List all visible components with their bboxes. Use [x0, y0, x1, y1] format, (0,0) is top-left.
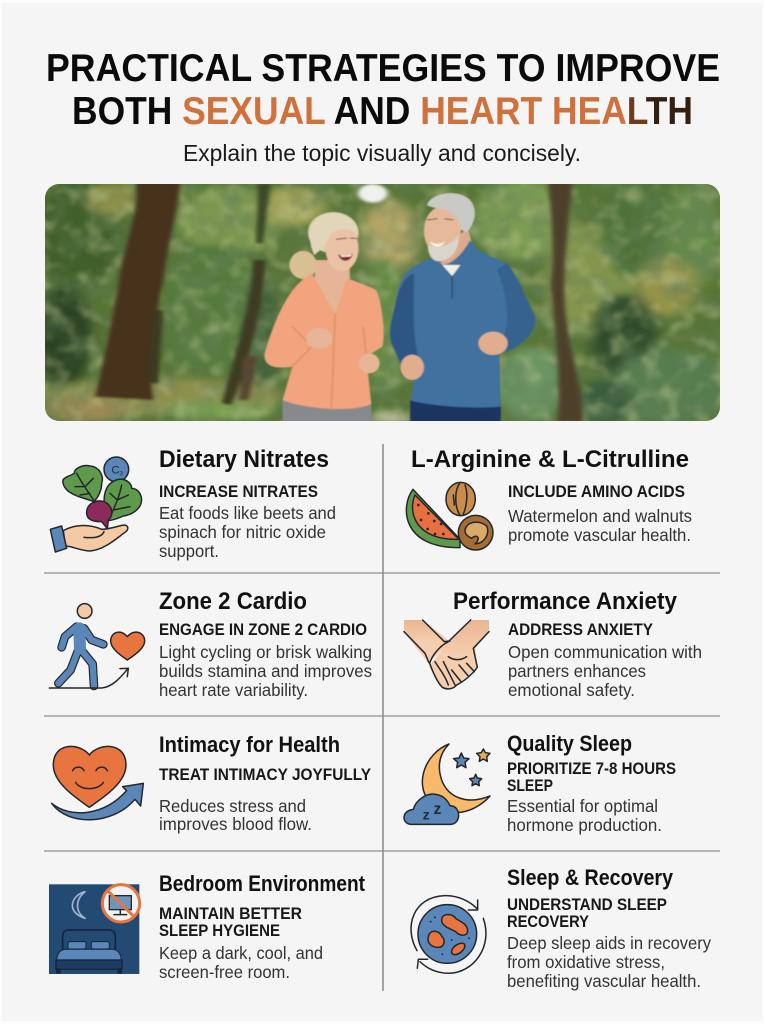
icon: crescent moon, stars and cloud: z — [423, 806, 430, 822]
icon: watermelon and walnuts — [406, 482, 493, 550]
subheading: SLEEP HYGIENE — [159, 922, 280, 940]
subheading: SLEEP — [507, 777, 553, 795]
body text: Deep sleep aids in recovery — [507, 933, 711, 953]
icon: cell with circular recovery arrows — [411, 896, 486, 973]
body text: emotional safety. — [508, 680, 635, 700]
body text: hormone production. — [507, 815, 662, 835]
title: PRACTICAL STRATEGIES TO IMPROVE — [46, 47, 720, 90]
icon: clasped hands — [404, 620, 489, 689]
body text: heart rate variability. — [159, 680, 308, 700]
panel: performance anxiety — [404, 588, 702, 700]
subheading — [507, 896, 667, 931]
body text: benefiting vascular health. — [507, 971, 701, 991]
body text: partners enhances — [508, 661, 646, 681]
photo: older couple jogging in a park — [34, 180, 731, 427]
body text — [159, 503, 336, 561]
subheading: ADDRESS ANXIETY — [508, 621, 653, 639]
title: BOTH SEXUAL AND HEART HEALTH — [72, 90, 693, 133]
panel: dietary nitrates — [50, 446, 336, 561]
subheading: TREAT INTIMACY JOYFULLY — [159, 766, 371, 784]
body text: spinach for nitric oxide — [159, 522, 326, 542]
heading: Intimacy for Health — [159, 732, 340, 757]
body text — [508, 642, 702, 700]
panel: intimacy for health — [52, 732, 371, 834]
icon: smiling heart with rising arrow — [52, 746, 143, 820]
subheading: INCREASE NITRATES — [159, 483, 318, 501]
heading: Bedroom Environment — [159, 871, 366, 896]
subheading: UNDERSTAND SLEEP — [507, 896, 667, 914]
icon: crescent moon, stars and cloud: z — [434, 801, 442, 818]
title — [46, 47, 720, 133]
body text: Light cycling or brisk walking — [159, 642, 372, 662]
subheading: PRIORITIZE 7-8 HOURS — [507, 760, 676, 778]
body text: Keep a dark, cool, and — [159, 943, 323, 963]
subheading — [159, 905, 302, 940]
body text: Reduces stress and — [159, 796, 306, 816]
heading: Performance Anxiety — [453, 588, 678, 615]
panel: l-arginine and l-citrulline — [406, 446, 692, 550]
body text: Eat foods like beets and — [159, 503, 336, 523]
body text: screen-free room. — [159, 962, 290, 982]
subheading: MAINTAIN BETTER — [159, 905, 302, 923]
body text: Essential for optimal — [507, 796, 658, 816]
heading: L-Arginine & L-Citrulline — [411, 446, 689, 473]
subheading — [507, 760, 676, 795]
icon: beet and spinach in open hand: 3 — [119, 471, 123, 478]
panel: sleep and recovery — [411, 865, 711, 991]
icon: walking figure, heart and rising arrow — [49, 604, 145, 688]
body text — [159, 943, 323, 982]
panel: bedroom environment — [49, 871, 366, 982]
body text — [159, 642, 372, 700]
heading: Quality Sleep — [507, 731, 632, 756]
body text: Open communication with — [508, 642, 702, 662]
woman's pants and jacket drawn as a single figure — [264, 212, 384, 423]
heading: Dietary Nitrates — [159, 446, 329, 473]
man's trousers and jacket drawn as a single figure — [390, 193, 535, 423]
body text: promote vascular health. — [508, 525, 691, 545]
panel: quality sleep — [404, 731, 676, 835]
body text: support. — [159, 541, 219, 561]
body text: from oxidative stress, — [507, 952, 665, 972]
body text: builds stamina and improves — [159, 661, 372, 681]
body text — [508, 506, 692, 545]
icon: beet and spinach in open hand: C — [111, 465, 120, 477]
heading: Sleep & Recovery — [507, 865, 674, 890]
subheading: ENGAGE IN ZONE 2 CARDIO — [159, 621, 367, 639]
panel: zone 2 cardio — [49, 588, 372, 700]
body text — [159, 796, 312, 834]
subtitle: Explain the topic visually and concisely. — [183, 140, 581, 166]
heading: Zone 2 Cardio — [159, 588, 307, 615]
body text — [507, 933, 711, 991]
grid dividers — [44, 444, 720, 991]
body text — [507, 796, 662, 835]
icon: dark bedroom with no-screen sign — [49, 884, 140, 974]
body text: Watermelon and walnuts — [508, 506, 692, 526]
body text: improves blood flow. — [159, 814, 312, 834]
subheading: INCLUDE AMINO ACIDS — [508, 483, 685, 501]
icon: beet and spinach in open hand — [50, 457, 142, 552]
icon: crescent moon, stars and cloud — [404, 744, 490, 824]
subheading: RECOVERY — [507, 913, 589, 931]
